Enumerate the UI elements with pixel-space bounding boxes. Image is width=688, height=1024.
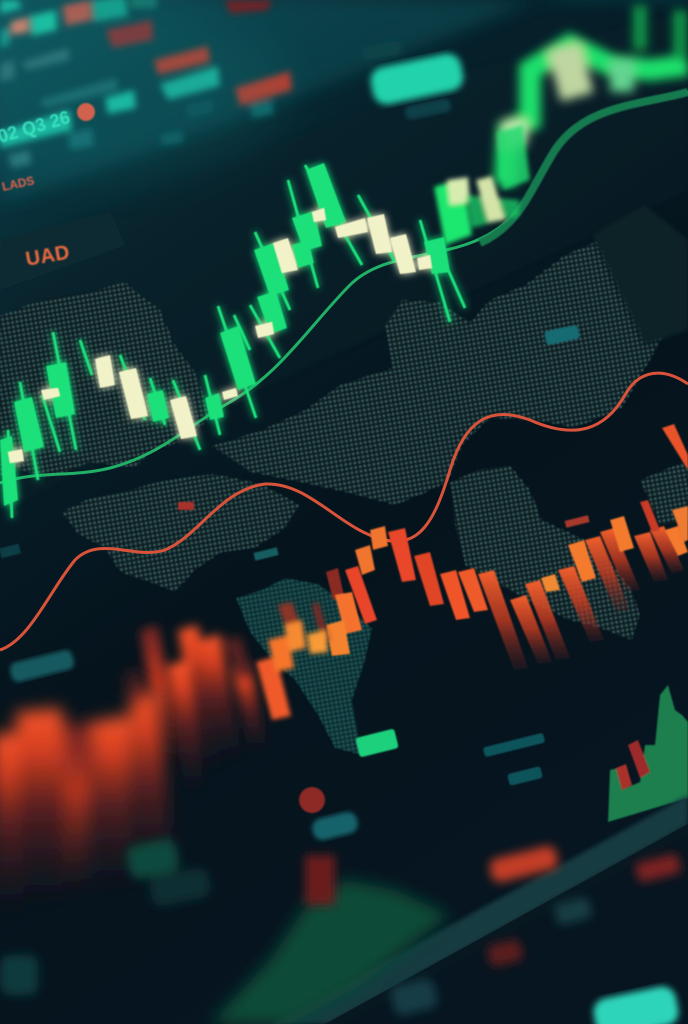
ui pills xyxy=(0,97,590,842)
red trend line xyxy=(0,373,688,650)
teal pill button bottom xyxy=(591,984,681,1024)
red indicator dot xyxy=(77,103,95,121)
right green bars xyxy=(608,685,688,822)
green trend line xyxy=(0,92,688,483)
blurred top ui labels xyxy=(0,0,401,168)
top-left teal glow xyxy=(0,0,290,180)
bottom diagonal rail xyxy=(270,795,688,1024)
world map xyxy=(0,205,688,755)
label: UAD: UAD xyxy=(24,242,71,271)
diagonal dashboard panels xyxy=(0,0,688,510)
label: LADS: LADS xyxy=(1,173,36,194)
bottom blurred ui xyxy=(0,837,682,1017)
green candlesticks xyxy=(0,163,465,518)
red bars midground xyxy=(326,424,688,670)
upper right blurred candlesticks xyxy=(503,5,688,185)
bottom blurred green area xyxy=(210,880,450,1024)
blurred red bars foreground xyxy=(256,602,330,720)
slightly blurred right candlesticks xyxy=(434,125,530,245)
teal pill button top xyxy=(368,51,466,107)
